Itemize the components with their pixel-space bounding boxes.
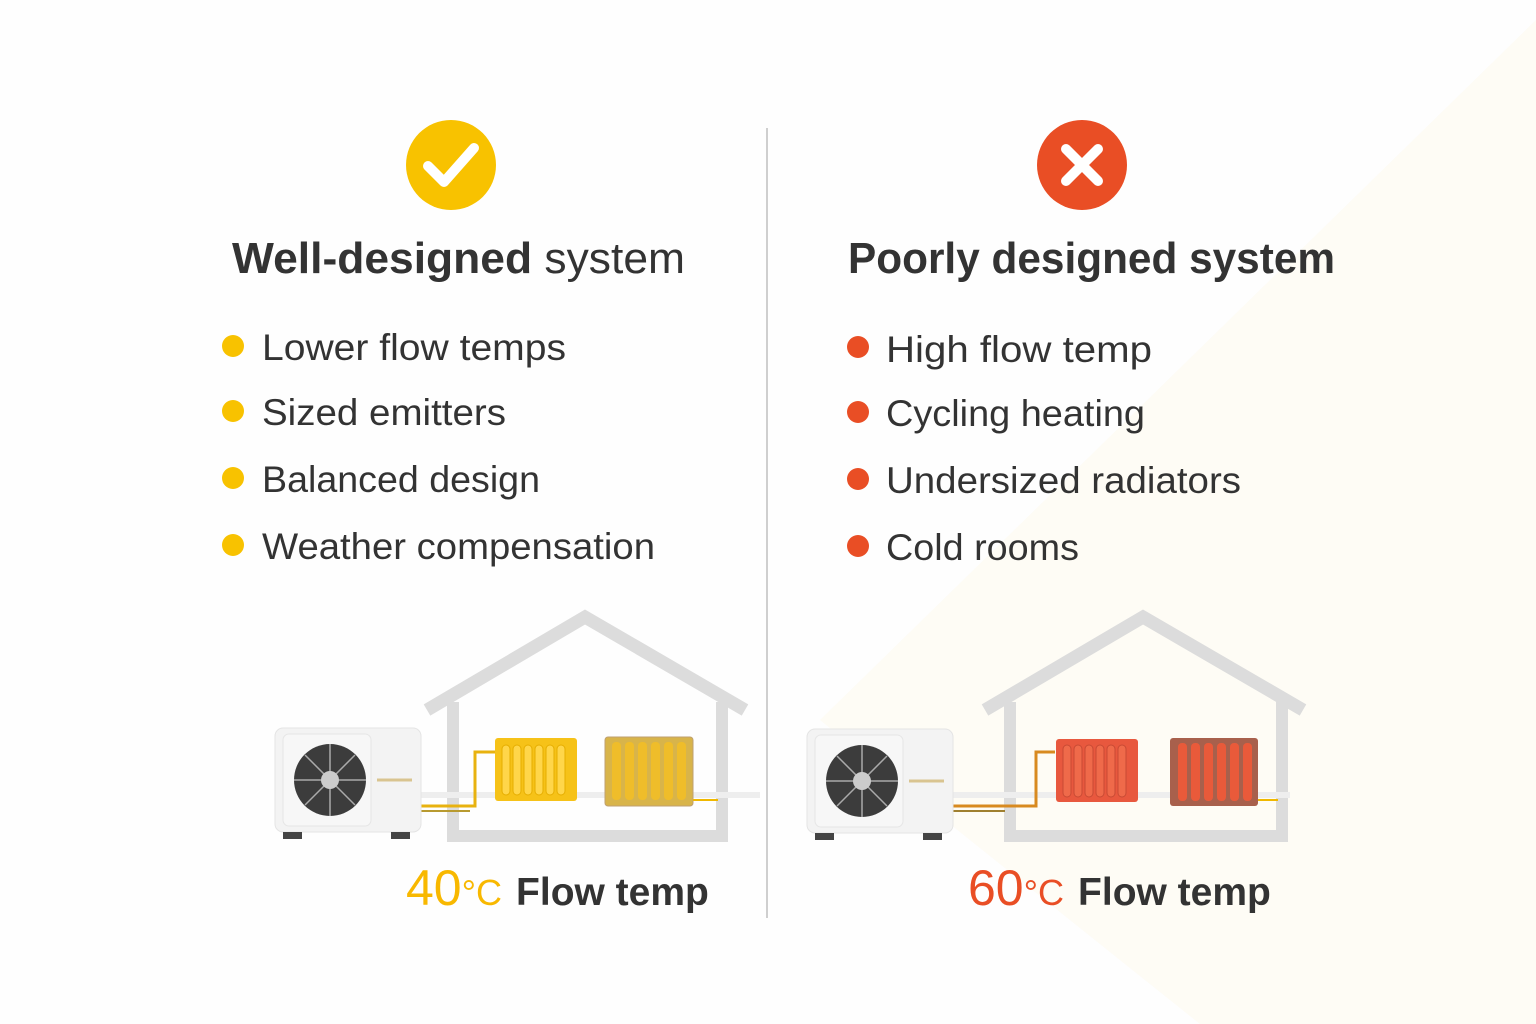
list: good: Weather compensation xyxy=(262,526,655,567)
list: poor: Cold rooms xyxy=(886,527,1079,568)
illustration: poor system xyxy=(807,617,1303,840)
heading: well-designed: Well-designed system xyxy=(232,234,685,283)
label: 40C flow temp: 40°C Flow temp xyxy=(406,860,709,916)
label: 60C flow temp: 60°C Flow temp xyxy=(968,860,1271,916)
list: poor: Undersized radiators xyxy=(886,460,1241,501)
list: poor: High flow temp xyxy=(886,329,1152,370)
list: good xyxy=(222,327,655,567)
list: good: Balanced design xyxy=(262,459,540,500)
list: poor: Cycling heating xyxy=(886,393,1145,434)
icon: check circle xyxy=(406,120,496,210)
heading: poorly designed: Poorly designed system xyxy=(848,234,1335,283)
list: good: Sized emitters xyxy=(262,392,506,433)
illustration: good system xyxy=(275,617,760,839)
icon: cross circle xyxy=(1037,120,1127,210)
list: good: Lower flow temps xyxy=(262,327,566,368)
list: poor xyxy=(847,329,1241,568)
